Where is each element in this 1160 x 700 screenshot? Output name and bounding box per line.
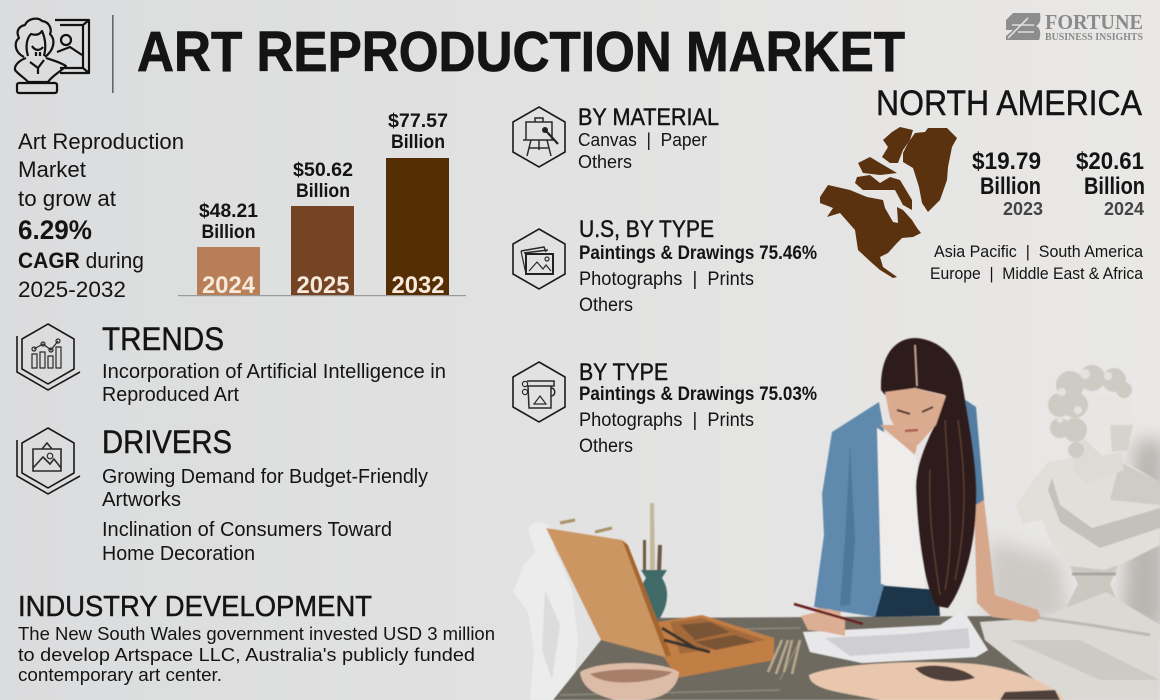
industry development: to develop Artspace LLC, Australia's publicly funded <box>18 644 475 665</box>
text: market growth: to grow at <box>18 186 116 211</box>
trends text: Reproduced Art <box>102 384 239 406</box>
map: North America <box>820 127 957 278</box>
brushes on table <box>768 640 800 674</box>
north america values: Billion <box>980 173 1041 200</box>
jeans <box>873 585 940 617</box>
bar chart <box>178 110 466 299</box>
other regions: Asia Pacific | South America <box>934 242 1144 261</box>
marble paper right <box>980 592 1160 700</box>
curls <box>1048 365 1132 458</box>
hand with brush <box>801 609 845 636</box>
icon: by material easel <box>513 107 565 167</box>
region heading: NORTH AMERICA <box>876 84 1143 123</box>
right sleeve <box>958 395 984 506</box>
icon: drivers hexagon <box>17 428 80 494</box>
icon: by type print roll <box>513 362 565 422</box>
bar chart: Billion <box>202 221 256 243</box>
cardigan <box>814 402 884 617</box>
header icon: bust and framed picture <box>15 19 89 93</box>
north america values: 2024 <box>1104 199 1144 219</box>
U.S by type text: Others <box>579 294 633 316</box>
U.S by type text <box>579 216 817 316</box>
drivers text: Inclination of Consumers Toward <box>102 519 392 541</box>
bar chart: 2025 <box>296 272 350 299</box>
by type text <box>579 359 817 457</box>
trends text: TRENDS <box>102 321 224 357</box>
drivers text: Artworks <box>102 489 181 511</box>
logo: Fortune Business Insights: FORTUNE <box>1045 10 1143 34</box>
wall shadows <box>1120 440 1160 630</box>
north america values: $20.61 <box>1076 148 1144 175</box>
by type text: Paintings & Drawings 75.03% <box>579 384 817 405</box>
by material text <box>578 104 719 172</box>
icon: U.S by type photos <box>513 229 565 289</box>
left arm <box>815 536 850 625</box>
title: ART REPRODUCTION MARKET <box>137 20 905 84</box>
logo: Fortune Business Insights: BUSINESS INSIGHTS <box>1045 32 1143 43</box>
drivers text: Growing Demand for Budget-Friendly <box>102 466 428 488</box>
by material text: Canvas | Paper <box>578 129 707 150</box>
neck <box>880 425 918 455</box>
bar chart: $50.62 <box>293 159 353 181</box>
text: market growth: Art Reproduction <box>18 129 184 154</box>
drivers text <box>102 424 428 565</box>
industry development <box>18 591 495 685</box>
long hair <box>881 338 976 608</box>
clay bowl <box>580 663 679 700</box>
white shirt <box>877 428 925 588</box>
by type text: Photographs | Prints <box>579 409 754 431</box>
trends text <box>102 321 446 406</box>
by type text: Others <box>579 435 633 457</box>
text: market growth: Market <box>18 157 86 182</box>
industry development: The New South Wales government invested USD 3 million <box>18 623 495 644</box>
small statue <box>513 522 578 700</box>
table <box>553 616 1160 700</box>
north america values: Billion <box>1084 173 1145 200</box>
by material text: Others <box>578 151 632 172</box>
by material text: BY MATERIAL <box>578 104 719 131</box>
bar chart: $48.21 <box>199 200 258 222</box>
wooden box <box>546 520 774 678</box>
artist <box>794 338 1041 636</box>
other regions <box>930 242 1144 283</box>
text: market growth: 2025-2032 <box>18 277 126 302</box>
U.S by type text: Photographs | Prints <box>579 268 754 290</box>
U.S by type text: U.S, BY TYPE <box>579 216 714 243</box>
icon: trends hexagon <box>17 324 80 390</box>
by type text: BY TYPE <box>579 359 668 386</box>
trends text: Incorporation of Artificial Intelligence in <box>102 361 446 383</box>
U.S by type text: Paintings & Drawings 75.46% <box>579 243 817 264</box>
north america values: $19.79 <box>972 148 1041 175</box>
industry development: contemporary art center. <box>18 664 222 685</box>
industry development: INDUSTRY DEVELOPMENT <box>18 591 372 623</box>
drivers text: DRIVERS <box>102 424 232 460</box>
bust sculpture <box>1016 365 1160 616</box>
right arm <box>974 500 1041 622</box>
palette <box>809 662 1064 700</box>
face <box>885 388 946 445</box>
header divider <box>112 15 114 93</box>
photo: artist at table with sculptures <box>513 338 1160 700</box>
text: market growth: 6.29% <box>18 215 92 245</box>
north america values <box>972 148 1145 219</box>
bar chart: Billion <box>391 131 445 153</box>
vase and brushes <box>640 503 667 618</box>
bar chart: 2024 <box>202 272 256 299</box>
drivers text: Home Decoration <box>102 543 255 565</box>
text: market growth: CAGR during <box>18 248 144 273</box>
other regions: Europe | Middle East & Africa <box>930 264 1144 283</box>
north america values: 2023 <box>1003 199 1043 219</box>
bar chart: $77.57 <box>388 110 448 132</box>
bar chart: 2032 <box>392 272 444 299</box>
text: market growth <box>18 129 184 302</box>
bar chart: Billion <box>296 180 350 202</box>
logo: Fortune Business Insights <box>1006 10 1143 43</box>
blueprint paper <box>803 610 988 663</box>
